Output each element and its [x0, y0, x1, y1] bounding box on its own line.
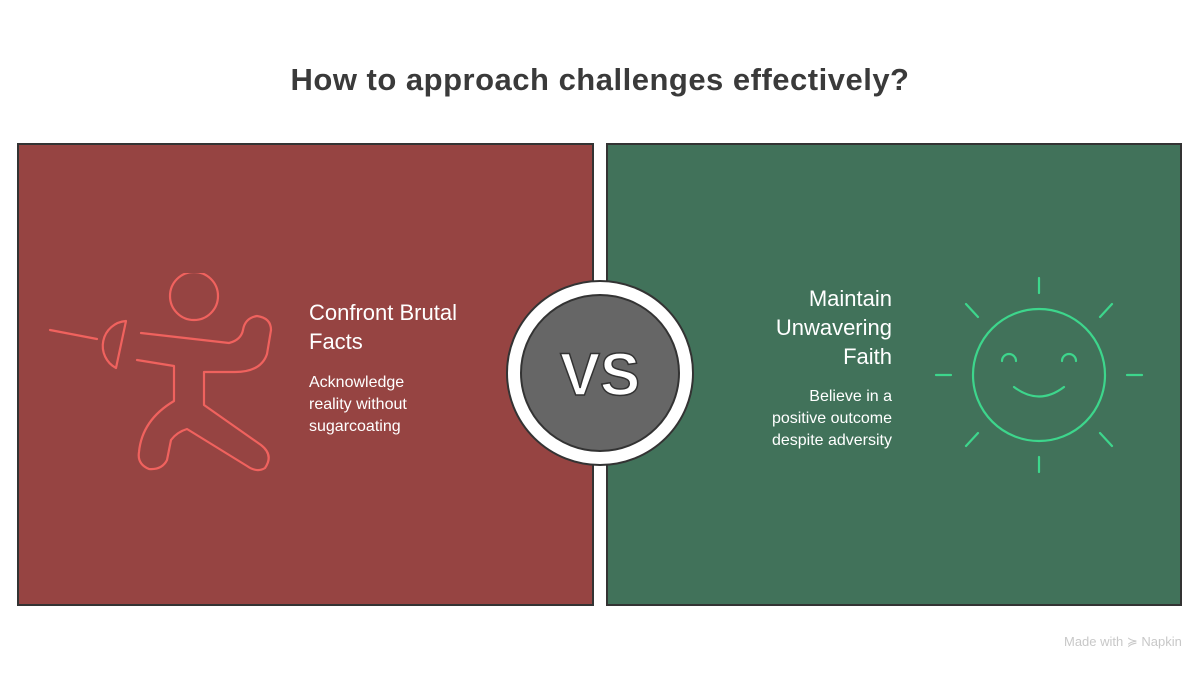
panel: maintain unwavering faith [606, 143, 1182, 606]
icon: fencer [49, 273, 272, 472]
heading: confront brutal facts: Confront Brutal Facts [309, 300, 457, 354]
footer: made with napkin: Made with ≽ Napkin [1064, 634, 1182, 649]
icon: smiling sun [935, 276, 1143, 474]
panel: confront brutal facts [17, 143, 594, 606]
text: believe in positive outcome: Believe in a positive outcome despite adversity [772, 388, 892, 449]
text: acknowledge reality: Acknowledge reality without sugarcoating [309, 374, 407, 435]
vs badge [506, 280, 694, 466]
heading: maintain unwavering faith: Maintain Unwavering Faith [776, 286, 892, 369]
vs badge: VS [560, 341, 640, 408]
title: How to approach challenges effectively? [290, 62, 910, 97]
